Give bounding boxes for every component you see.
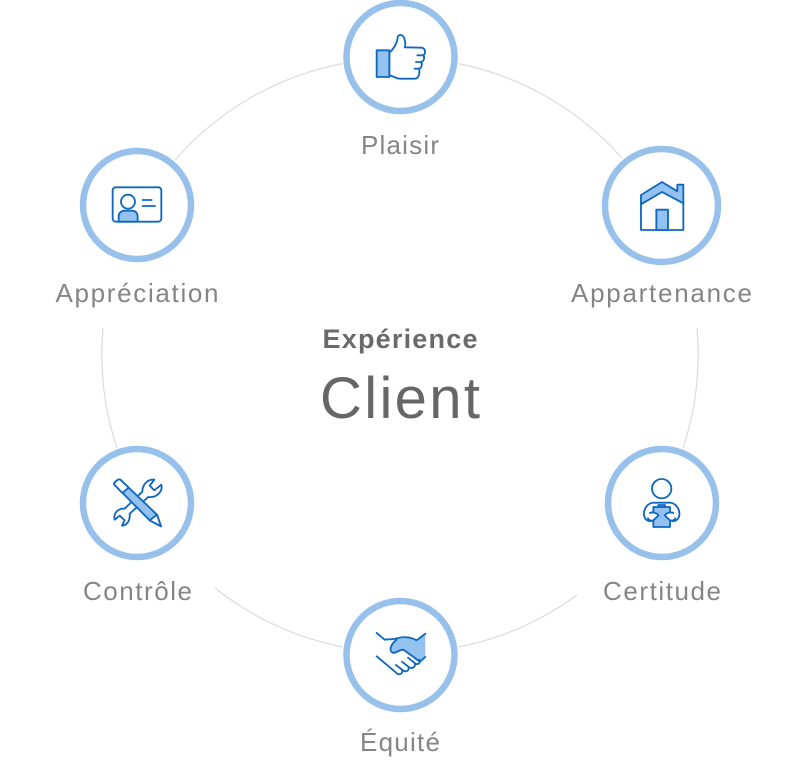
icon: house [641, 182, 683, 230]
icon: id card [113, 187, 161, 222]
center heading [320, 324, 480, 431]
icon: handshake [377, 633, 425, 674]
heading: Client: Client [320, 366, 480, 431]
node: Contrôle [83, 449, 192, 606]
icon: pencil and wrench [114, 479, 162, 526]
node: Certitude [603, 449, 721, 606]
label: Équité: Équité [360, 727, 440, 757]
icon: thumbs up [377, 35, 425, 79]
node: Plaisir [346, 3, 454, 160]
node: Appartenance [571, 149, 752, 308]
node: Appréciation [56, 151, 218, 308]
icon: person with clipboard [644, 479, 679, 527]
label: Appréciation: Appréciation [56, 278, 218, 308]
label: Certitude: Certitude [603, 576, 721, 606]
label: Plaisir: Plaisir [361, 130, 439, 160]
label: Contrôle: Contrôle [83, 576, 192, 606]
label: Appartenance: Appartenance [571, 278, 752, 308]
heading: Expérience: Expérience [322, 324, 478, 354]
node: Équité [346, 601, 454, 757]
connecting circle [102, 64, 698, 647]
